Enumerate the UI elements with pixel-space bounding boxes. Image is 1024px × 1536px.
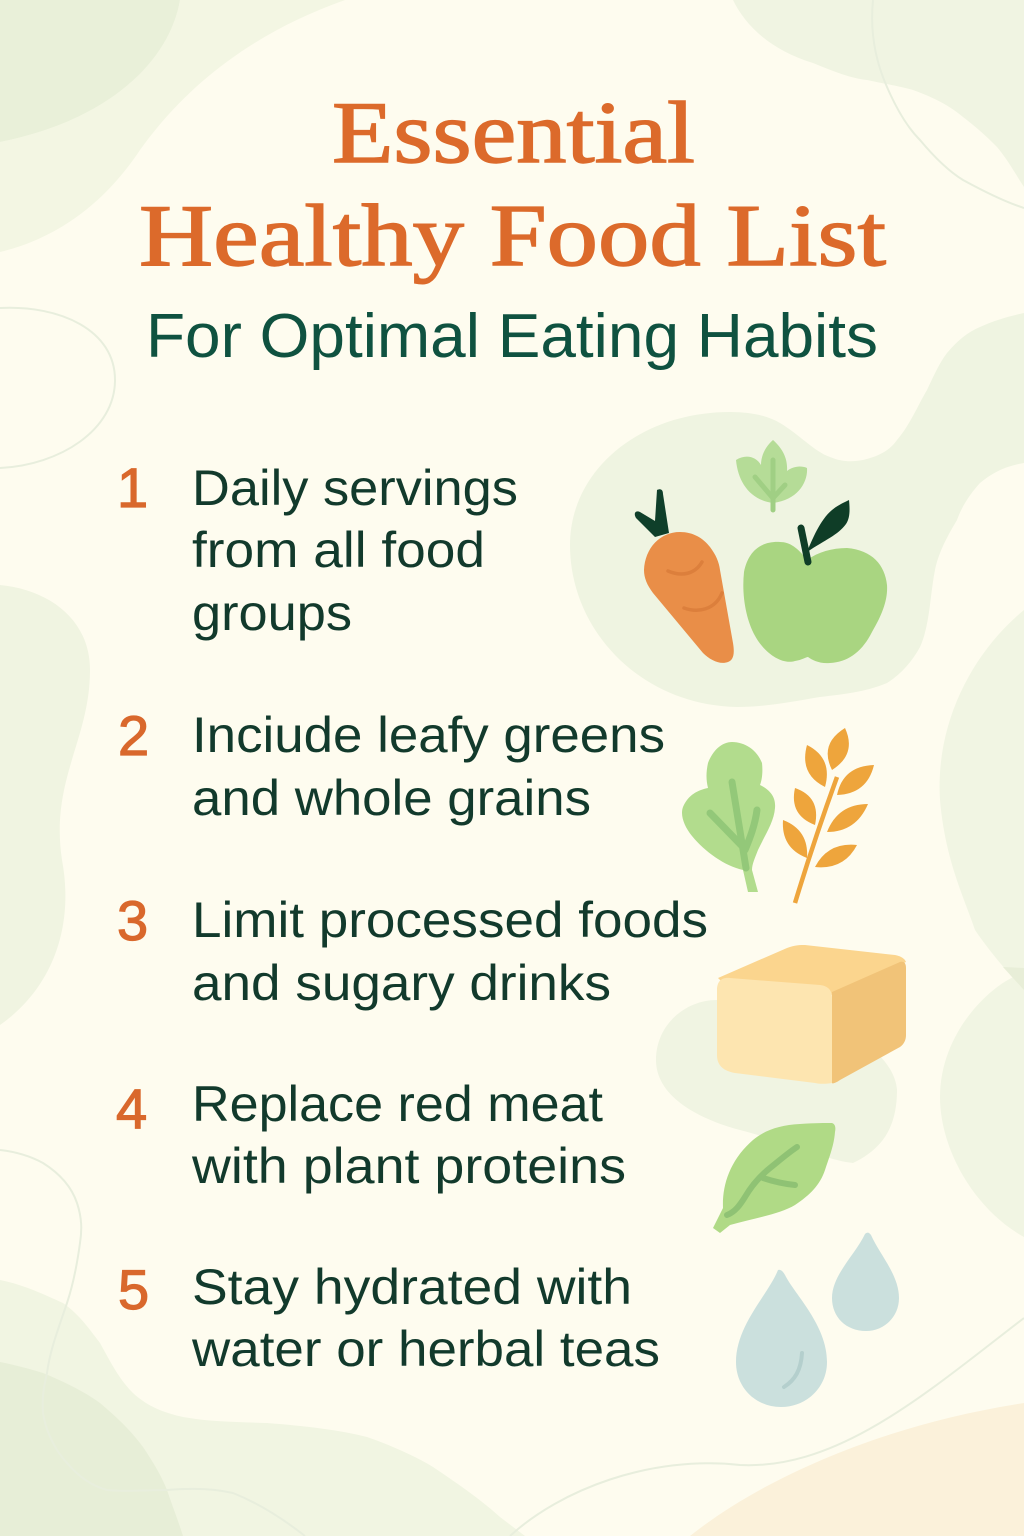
list item 2: Inciude leafy greens bbox=[192, 707, 665, 763]
subtitle: For Optimal Eating Habits bbox=[146, 302, 878, 371]
list item 4: with plant proteins bbox=[191, 1138, 626, 1194]
list item 1: from all food bbox=[192, 522, 485, 578]
list item 3: Limit processed foods bbox=[192, 892, 708, 948]
list item 5: Stay hydrated with bbox=[192, 1259, 632, 1315]
list item 1: Daily servings bbox=[192, 460, 518, 516]
list item 5: water or herbal teas bbox=[191, 1321, 660, 1377]
icon: wheat bbox=[783, 728, 874, 903]
list item 4: 4 bbox=[116, 1077, 147, 1140]
list item 5 bbox=[118, 1258, 660, 1377]
list item 5: 5 bbox=[118, 1258, 149, 1321]
icon: carrot bbox=[635, 489, 734, 663]
list item 1 bbox=[117, 456, 518, 641]
list item 3: 3 bbox=[117, 889, 148, 952]
list item 3: and sugary drinks bbox=[192, 955, 611, 1011]
icon: tofu block bbox=[717, 945, 906, 1084]
title bbox=[139, 85, 886, 285]
list item 1: groups bbox=[192, 585, 352, 641]
icon: water drops bbox=[736, 1233, 899, 1407]
list item 4 bbox=[116, 1076, 626, 1194]
title: Healthy Food List bbox=[139, 188, 886, 285]
icon: small leaf bbox=[736, 440, 807, 510]
list item 2: and whole grains bbox=[192, 770, 591, 826]
list item 2 bbox=[118, 704, 665, 826]
list item 4: Replace red meat bbox=[192, 1076, 603, 1132]
icon: leafy green bbox=[682, 742, 775, 892]
list item 1: 1 bbox=[117, 456, 148, 519]
icon: apple bbox=[743, 500, 887, 663]
list item 2: 2 bbox=[118, 704, 149, 767]
icon: leaf bbox=[713, 1123, 835, 1233]
title: Essential bbox=[332, 85, 695, 182]
list item 3 bbox=[117, 889, 708, 1011]
